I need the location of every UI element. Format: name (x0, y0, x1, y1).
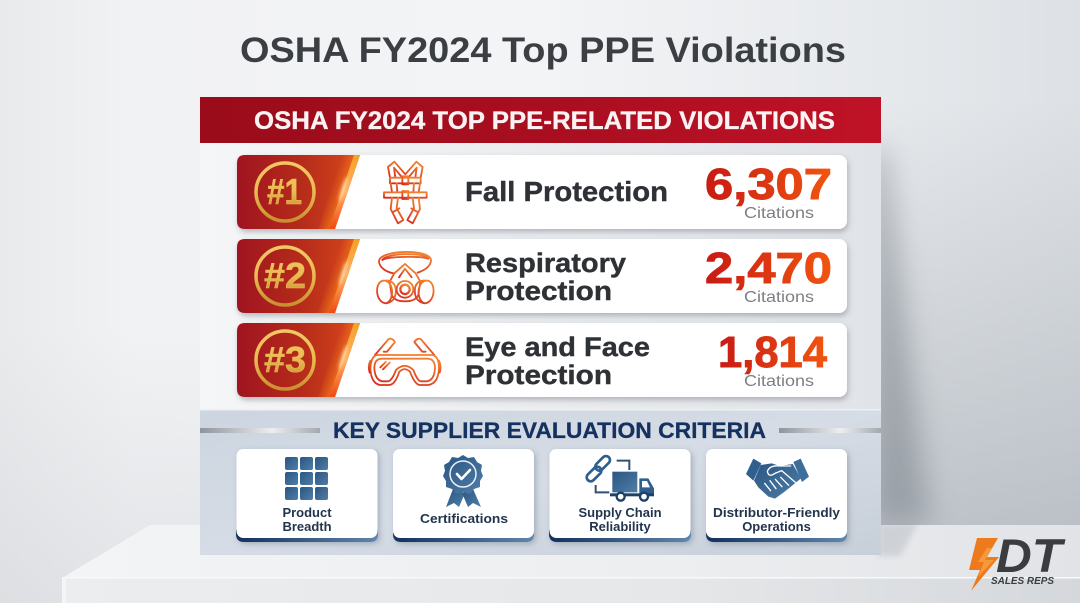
icon: certification ribbon (443, 455, 483, 507)
card label: Distributor-Friendly (713, 505, 841, 520)
icon: respirator mask (377, 252, 434, 303)
citation count: Citations (744, 289, 814, 306)
section heading: KEY SUPPLIER EVALUATION CRITERIA (333, 418, 766, 443)
rank badge 3 (237, 323, 360, 397)
row label (465, 248, 626, 306)
logo: DT Sales Reps: DT (996, 529, 1067, 582)
citation count: 1,814 (718, 328, 828, 377)
rank badge 1: #1 (267, 171, 302, 212)
citation count: Citations (744, 373, 814, 390)
card label: Product (282, 505, 332, 520)
row: eye and face protection (237, 323, 847, 397)
card label (578, 505, 662, 534)
rank badge 2 (237, 239, 360, 313)
title: OSHA FY2024 Top PPE Violations (240, 31, 846, 70)
rank badge 2: #2 (264, 255, 306, 296)
rank badge 3: #3 (264, 339, 306, 380)
card: supply chain reliability (549, 449, 691, 542)
logo: DT Sales Reps: SALES REPS (991, 576, 1054, 587)
card label: Supply Chain (578, 505, 662, 520)
citation count: 2,470 (705, 244, 832, 293)
icon: grid (285, 457, 328, 500)
card: certifications (393, 449, 534, 542)
panel: supplier criteria (200, 409, 881, 555)
row: fall protection (237, 155, 847, 229)
icon: safety harness (384, 162, 427, 223)
card: distributor-friendly operations (706, 449, 847, 542)
section heading (200, 418, 881, 443)
icon: lightning bolt (969, 538, 999, 591)
citation count: Citations (744, 205, 814, 222)
header banner (200, 97, 881, 143)
panel: violations board (200, 97, 881, 555)
icon: chain and truck (585, 454, 654, 501)
card label: Reliability (589, 519, 651, 534)
icon: safety goggles (369, 339, 441, 385)
row label: Protection (465, 360, 612, 390)
card: product breadth (236, 449, 378, 542)
board cast shadow (870, 150, 930, 525)
rank badge 1 (237, 155, 360, 229)
row: respiratory protection (237, 239, 847, 313)
citation count (705, 244, 832, 306)
icon: handshake (746, 459, 809, 499)
row label (465, 332, 650, 390)
card label: Operations (742, 519, 811, 534)
row label: Respiratory (465, 248, 626, 278)
row label: Fall Protection (465, 176, 668, 207)
header banner: OSHA FY2024 TOP PPE-RELATED VIOLATIONS (254, 107, 835, 135)
row label: Eye and Face (465, 332, 650, 362)
citation count (705, 160, 832, 222)
citation count: 6,307 (705, 160, 832, 209)
card label (713, 505, 841, 534)
logo: DT Sales Reps (969, 529, 1067, 591)
card label (282, 505, 332, 534)
card label: Breadth (282, 519, 332, 534)
display shelf (62, 523, 1080, 603)
card label: Certifications (420, 511, 508, 526)
row label: Protection (465, 276, 612, 306)
